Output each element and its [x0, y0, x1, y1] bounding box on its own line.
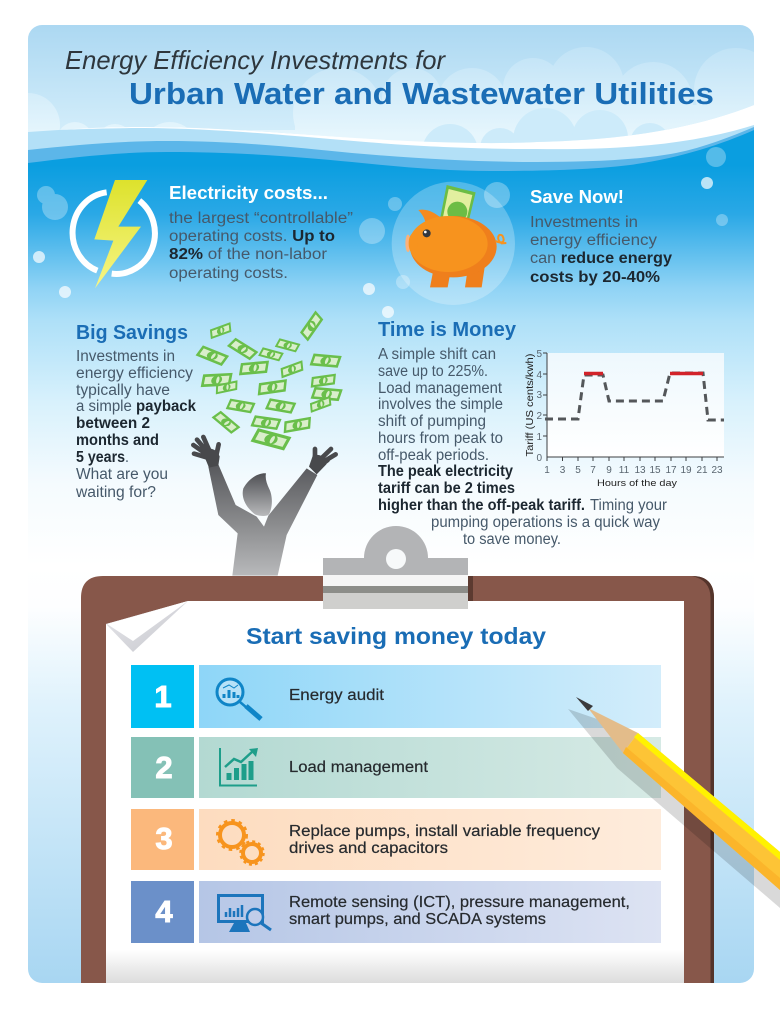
y axis title: Tariff (US cents/kwh): [525, 354, 536, 456]
board edge shadow: [692, 576, 714, 983]
icon: monitor with magnifier: [217, 894, 271, 932]
text: big savings body: Investments in: [76, 348, 175, 365]
y axis labels: 1: [536, 432, 542, 443]
deep water with gradient: [28, 130, 754, 983]
step text 4: smart pumps, and SCADA systems: [289, 911, 546, 928]
chart line: peak segments: [584, 372, 703, 375]
icon: magnifying glass: [217, 679, 261, 719]
step number 3: 3: [155, 821, 173, 856]
x axis labels: 11: [619, 465, 630, 476]
step 3: replace pumps: [131, 809, 661, 870]
text: big savings body: 5 years.: [76, 449, 129, 466]
white wave band: [60, 105, 754, 149]
x axis labels: 1: [544, 465, 550, 476]
text: time is money body: to save money.: [463, 531, 561, 548]
chart: tariff by hour: [525, 349, 724, 489]
icon: falling banknotes: [198, 312, 341, 449]
text: big savings body: between 2: [76, 415, 150, 432]
paper bottom shading: [106, 950, 684, 983]
mid blue wave: [28, 127, 754, 171]
step text 4: [289, 894, 630, 928]
clipboard board: [81, 576, 714, 983]
x axis labels: 9: [606, 465, 612, 476]
icon: gears: [218, 820, 264, 864]
pencil: [568, 697, 780, 908]
step 1: energy audit: [131, 665, 661, 728]
text: time is money body: [378, 346, 667, 548]
step number 1: 1: [154, 679, 172, 714]
pencil highlight: [634, 733, 780, 860]
panel: save now: [392, 182, 672, 305]
text: time is money body: hours from peak to: [378, 430, 503, 447]
y axis labels: 3: [536, 390, 542, 401]
text: time is money body: The peak electricity: [378, 463, 513, 480]
heading: electricity costs: Electricity costs...: [169, 183, 328, 203]
x axis title: Hours of the day: [597, 478, 677, 489]
step text 3: [289, 823, 600, 857]
text: time is money body: A simple shift can: [378, 346, 496, 363]
icon: person with raised arms: [193, 437, 336, 576]
text: big savings body: energy efficiency: [76, 365, 193, 382]
heading: start saving money today: Start saving money today: [246, 623, 546, 649]
x axis labels: 7: [590, 465, 596, 476]
icon: piggy bank: [392, 182, 515, 305]
text: electricity costs body: operating costs.: [169, 265, 288, 282]
y axis labels: 4: [536, 370, 542, 381]
step text 1: Energy audit: [289, 687, 385, 704]
text: time is money body: tariff can be 2 times: [378, 480, 515, 497]
text: time is money body: pumping operations is a quick way: [431, 514, 660, 531]
step number 2: 2: [155, 750, 173, 785]
text: big savings body: a simple payback: [76, 398, 196, 415]
x axis labels: 3: [560, 465, 566, 476]
text: big savings body: months and: [76, 432, 159, 449]
text: time is money body: higher than the off-peak tariff.: [378, 497, 585, 514]
heading: time is money: Time is Money: [378, 319, 517, 341]
step number 4: 4: [155, 894, 173, 929]
step 2: load management: [131, 737, 661, 798]
text: electricity costs body: operating costs. Up to: [169, 228, 335, 245]
text: electricity costs body: [169, 210, 353, 282]
x axis labels: [544, 465, 723, 476]
panel: electricity costs: [73, 180, 353, 288]
step 4: remote sensing: [131, 881, 661, 943]
x axis labels: 19: [680, 465, 692, 476]
text: electricity costs body: 82% of the non-labor: [169, 246, 327, 263]
text: save now body: costs by 20-40%: [530, 269, 660, 286]
step text 4: Remote sensing (ICT), pressure management,: [289, 894, 630, 911]
text: save now body: [530, 214, 672, 286]
text: save now body: energy efficiency: [530, 232, 657, 249]
panel: big savings: [75, 312, 341, 576]
pencil lead: [576, 697, 593, 711]
text: time is money body: Timing your: [590, 497, 667, 514]
text: time is money body: shift of pumping: [378, 413, 486, 430]
x axis labels: 13: [634, 465, 646, 476]
x axis labels: 23: [711, 465, 723, 476]
title: line two: Urban Water and Wastewater Utilities: [129, 76, 714, 111]
heading: save now: Save Now!: [530, 187, 624, 207]
y axis labels: [536, 349, 542, 464]
clipboard: [81, 526, 714, 983]
chart line: off-peak dashed: [545, 373, 724, 420]
x axis labels: 21: [696, 465, 708, 476]
clip shadow: [468, 576, 473, 601]
x axis labels: 15: [649, 465, 661, 476]
x axis labels: 17: [665, 465, 677, 476]
text: big savings body: [75, 348, 196, 501]
x axis labels: 5: [575, 465, 581, 476]
pencil shadow: [568, 709, 780, 908]
icon: growth chart: [220, 748, 258, 786]
text: time is money body: save up to 225%.: [378, 363, 488, 380]
metal clip: [323, 526, 468, 609]
y axis labels: 0: [536, 453, 542, 464]
light wave band: [28, 105, 754, 162]
text: time is money body: Load management: [378, 380, 503, 397]
pencil lower facet: [623, 747, 780, 890]
y axis labels: 5: [536, 349, 542, 360]
paper sheet: [106, 601, 684, 983]
text: big savings body: What are you: [76, 466, 168, 483]
text: big savings body: typically have: [76, 382, 170, 399]
text: time is money body: off-peak periods.: [378, 447, 489, 464]
text: electricity costs body: the largest “controllable”: [169, 210, 353, 227]
heading: big savings: Big Savings: [76, 322, 188, 344]
text: save now body: can reduce energy: [530, 250, 672, 267]
step text 3: Replace pumps, install variable frequency: [289, 823, 600, 840]
pencil wood tip: [588, 708, 638, 753]
panel: time is money: [378, 319, 724, 548]
y axis labels: 2: [536, 411, 542, 422]
step text 2: Load management: [289, 759, 429, 776]
pencil body: [623, 733, 780, 890]
folded page corner: [106, 601, 188, 652]
step text 3: drives and capacitors: [289, 840, 448, 857]
text: time is money body: involves the simple: [378, 396, 503, 413]
text: save now body: Investments in: [530, 214, 638, 231]
title: line one: Energy Efficiency Investments for: [65, 45, 446, 75]
text: big savings body: waiting for?: [75, 484, 156, 501]
icon: lightning bolt in ring: [73, 180, 155, 288]
